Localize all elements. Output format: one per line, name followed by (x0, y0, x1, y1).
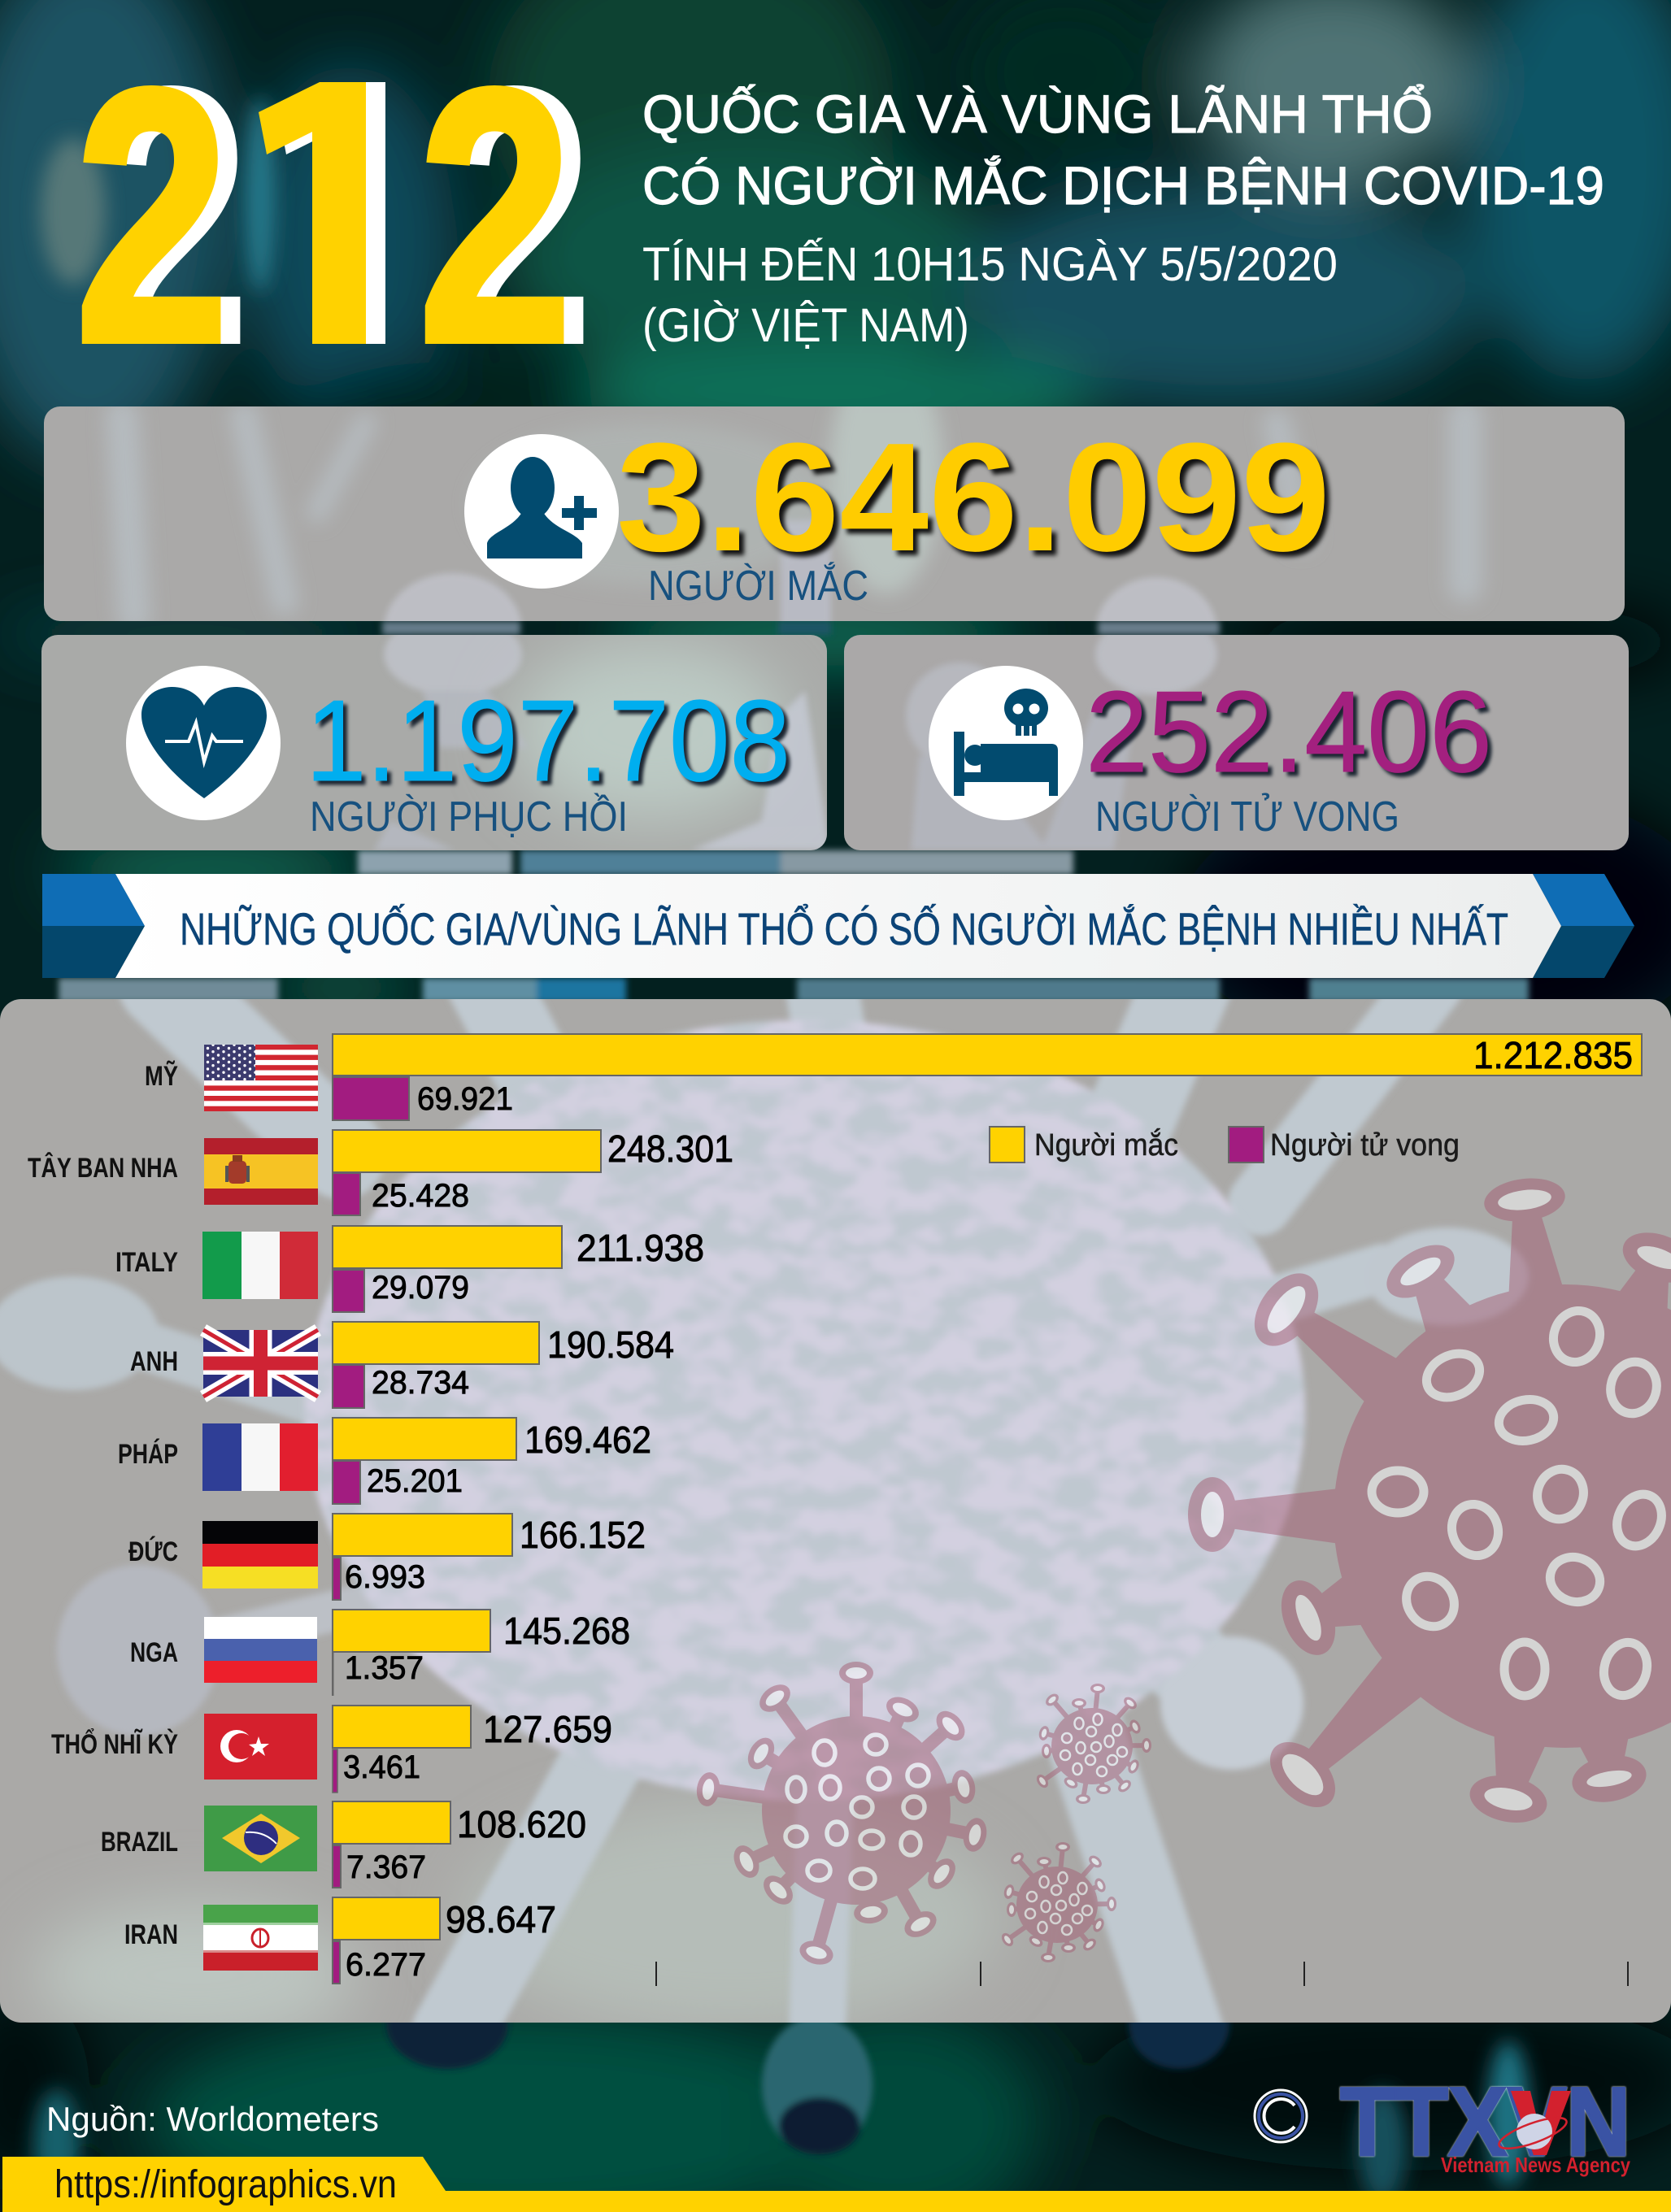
headline text: QUỐC GIA VÀ VÙNG LÃNH THỔ (642, 84, 1433, 144)
row: Brazil: 108.620 (457, 1803, 586, 1845)
big number 212 (81, 82, 584, 344)
legend: Người mắc (1034, 1128, 1178, 1162)
label: deaths: NGƯỜI TỬ VONG (1095, 793, 1399, 841)
footer band with url (2, 2157, 1671, 2212)
row: Pháp: 25.201 (367, 1463, 463, 1499)
flag: Russia (204, 1617, 317, 1683)
panel: total cases (44, 406, 1625, 621)
flag: USA (204, 1045, 318, 1111)
legend: Người tử vong (1270, 1128, 1460, 1162)
icon: heart (126, 666, 281, 820)
row: Thổ Nhĩ Kỳ: 127.659 (483, 1708, 612, 1750)
row: Pháp: 169.462 (524, 1419, 651, 1461)
flag: Iran (203, 1905, 318, 1971)
row: Iran: 6.277 (346, 1947, 426, 1983)
row: Anh (130, 1322, 674, 1408)
headline text: CÓ NGƯỜI MẮC DỊCH BỆNH COVID-19 (642, 155, 1604, 215)
flag: Italy (202, 1232, 318, 1299)
row: Pháp: PHÁP (118, 1439, 178, 1470)
big number 212: 1 (252, 18, 407, 421)
row: Nga (130, 1610, 630, 1696)
chart axis ticks (656, 1962, 1628, 1986)
copyright mark (1255, 2090, 1307, 2142)
panel: chart (0, 984, 1671, 2049)
headline text (642, 84, 1604, 352)
row: Brazil (101, 1801, 586, 1888)
legend (990, 1127, 1460, 1162)
number: deaths: 252.406 (1086, 667, 1492, 797)
headline text: TÍNH ĐẾN 10H15 NGÀY 5/5/2020 (642, 238, 1338, 291)
row: Nga: 1.357 (345, 1650, 424, 1686)
row: Italy: 29.079 (372, 1270, 469, 1306)
icon: bed and skull (929, 666, 1083, 820)
big number 212: 2 (75, 15, 229, 418)
row: Thổ Nhĩ Kỳ (51, 1706, 612, 1793)
row: Tây Ban Nha: 25.428 (372, 1178, 469, 1214)
row: Anh: 28.734 (372, 1365, 469, 1401)
row: Đức: 166.152 (520, 1514, 646, 1556)
row: Mỹ: 69.921 (417, 1081, 513, 1117)
big number 212: 2 (418, 15, 572, 418)
row: Brazil: 7.367 (346, 1849, 426, 1885)
row: Italy: 211.938 (577, 1227, 704, 1269)
row: Tây Ban Nha (28, 1128, 733, 1215)
row: Iran: 98.647 (446, 1898, 556, 1940)
label: recovered: NGƯỜI PHỤC HỒI (310, 793, 628, 841)
icon: small virus top (1034, 1684, 1151, 1804)
row: Mỹ: MỸ (145, 1061, 178, 1092)
icon: person plus (464, 434, 619, 589)
row: Thổ Nhĩ Kỳ: THỔ NHĨ KỲ (51, 1729, 178, 1760)
row: Tây Ban Nha: TÂY BAN NHA (28, 1153, 178, 1184)
flag: Germany (202, 1521, 318, 1588)
footer band with url: https://infographics.vn (54, 2163, 397, 2206)
row: Nga: NGA (130, 1637, 178, 1668)
row: Đức: 6.993 (345, 1559, 425, 1595)
section ribbon (42, 874, 1634, 978)
row: Đức (128, 1514, 646, 1600)
flag: Turkey (204, 1714, 317, 1780)
icon: medium virus (694, 1662, 990, 1968)
label: cases: NGƯỜI MẮC (648, 562, 868, 610)
row: Pháp (118, 1418, 651, 1504)
panel: deaths (844, 614, 1629, 850)
row: Anh: 190.584 (547, 1323, 674, 1366)
row: Italy: ITALY (115, 1247, 178, 1278)
virus photo ghost (0, 984, 1529, 2049)
flag: UK (203, 1330, 318, 1397)
source note: Nguồn: Worldometers (46, 2100, 379, 2138)
row: Đức: ĐỨC (128, 1536, 178, 1567)
row: Iran: IRAN (124, 1919, 178, 1950)
row: Nga: 145.268 (503, 1610, 630, 1652)
row: Italy (115, 1226, 704, 1312)
logo: TTXVN: TTXVN (1340, 2067, 1630, 2176)
flag: Spain (204, 1138, 318, 1205)
number: total cases: 3.646.099 (616, 411, 1330, 584)
row: Mỹ: 1.212.835 (1473, 1034, 1633, 1076)
row: Tây Ban Nha: 248.301 (607, 1128, 733, 1170)
flag: France (202, 1423, 318, 1491)
row: Anh: ANH (130, 1346, 178, 1377)
headline text: (GIỜ VIỆT NAM) (642, 299, 969, 352)
panel: recovered (41, 614, 829, 850)
icon: small virus bottom (999, 1842, 1116, 1962)
row: Mỹ (145, 1034, 1642, 1120)
icon: large virus (1188, 1174, 1671, 1829)
number: recovered: 1.197.708 (306, 676, 790, 806)
logo: TTXVN: Vietnam News Agency (1441, 2153, 1630, 2177)
row: Thổ Nhĩ Kỳ: 3.461 (343, 1749, 420, 1785)
row: Brazil: BRAZIL (101, 1827, 178, 1858)
row: Iran (124, 1897, 556, 1984)
flag: Brazil (204, 1806, 317, 1871)
